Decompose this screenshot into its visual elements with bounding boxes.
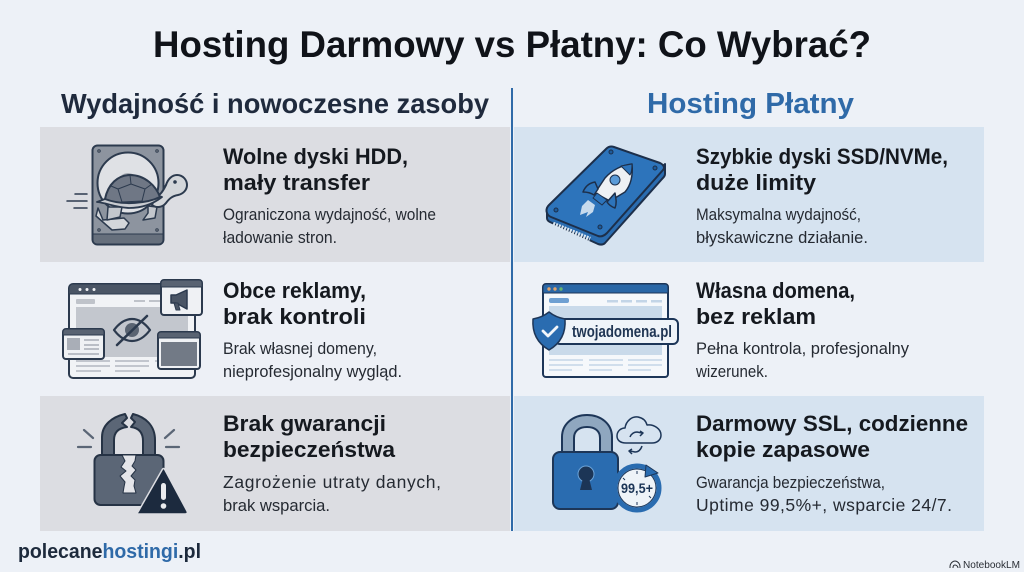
text block: SSL and backups: Uptime 99,5%+, wsparcie 24/7. <box>696 495 952 515</box>
panel: paid hosting rows <box>514 127 984 531</box>
text block: no security: Zagrożenie utraty danych, <box>223 472 441 492</box>
text block: SSL and backups: Gwarancja bezpieczeństwa, <box>696 474 885 492</box>
text block: foreign ads <box>223 278 402 381</box>
text block: slow disks <box>223 144 436 247</box>
watermark: NotebookLM: NotebookLM <box>963 560 1020 571</box>
text block: foreign ads: Brak własnej domeny, <box>223 340 377 358</box>
icon: turtle on hard disk <box>67 146 187 244</box>
text block: no security: brak wsparcia. <box>223 497 330 515</box>
text block: fast disks: Maksymalna wydajność, <box>696 206 861 224</box>
text block: foreign ads: Obce reklamy, <box>223 278 366 303</box>
title: Hosting Darmowy vs Płatny: Co Wybrać? <box>153 24 871 65</box>
icon: browser with own domain <box>533 284 678 377</box>
icon: browser with own domain: twojadomena.pl <box>572 322 672 341</box>
icon: broken padlock with warning <box>78 414 187 514</box>
text block: no security: bezpieczeństwa <box>223 437 396 462</box>
text block: SSL and backups: Darmowy SSL, codzienne <box>696 411 968 436</box>
text block: no security <box>223 411 441 515</box>
text block: fast disks: duże limity <box>696 170 817 195</box>
text block: SSL and backups: kopie zapasowe <box>696 437 870 462</box>
text block: slow disks: ładowanie stron. <box>223 229 337 247</box>
heading: right column: Hosting Płatny <box>647 88 854 120</box>
text block: own domain: Pełna kontrola, profesjonalny <box>696 340 910 358</box>
icon: SSD with rocket <box>547 147 665 245</box>
text block: own domain: bez reklam <box>696 304 816 329</box>
column divider <box>511 88 513 531</box>
text block: slow disks: mały transfer <box>223 170 370 195</box>
text block: own domain: Własna domena, <box>696 278 855 303</box>
text block: fast disks <box>696 144 948 247</box>
text block: slow disks: Ograniczona wydajność, wolne <box>223 206 436 224</box>
icon: browser with foreign ads <box>63 280 202 378</box>
text block: no security: Brak gwarancji <box>223 411 386 436</box>
text block: slow disks: Wolne dyski HDD, <box>223 144 408 169</box>
text block: foreign ads: brak kontroli <box>223 304 366 329</box>
text block: fast disks: Szybkie dyski SSD/NVMe, <box>696 144 948 169</box>
text block: foreign ads: nieprofesjonalny wygląd. <box>223 363 402 381</box>
brand: polecanehostingi.pl: polecanehostingi.pl <box>18 541 201 563</box>
text block: SSL and backups <box>696 411 968 515</box>
heading: left column: Wydajność i nowoczesne zasoby <box>61 88 489 119</box>
icon: padlock, cloud backup and uptime clock: 99,5+ <box>621 480 653 496</box>
text block: own domain: wizerunek. <box>695 363 768 381</box>
icon: padlock, cloud backup and uptime clock <box>553 415 661 510</box>
text block: own domain <box>695 278 910 381</box>
text block: fast disks: błyskawiczne działanie. <box>696 229 868 247</box>
panel: free hosting rows <box>40 127 510 531</box>
